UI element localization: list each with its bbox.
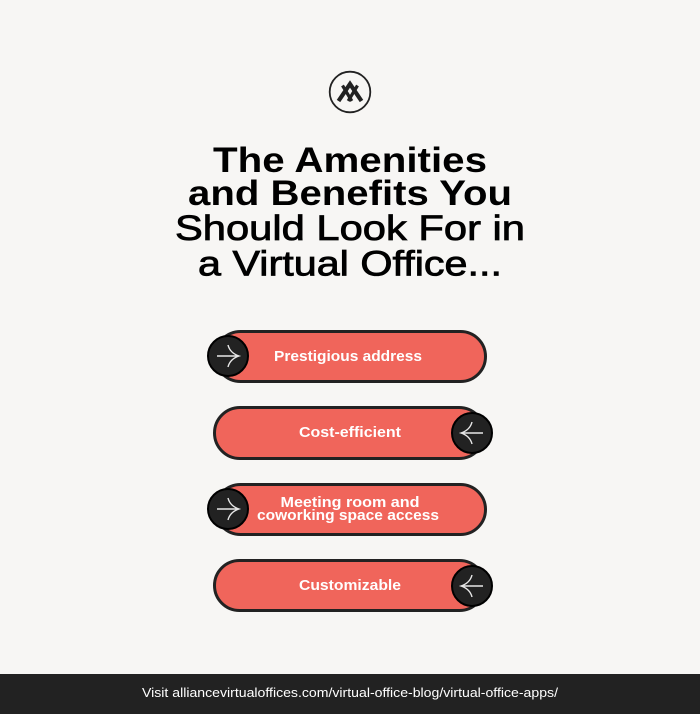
footer link text: Visit alliancevirtualoffices.com/virtual-office-blog/virtual-office-apps/ [142,685,558,700]
title: and Benefits You [188,173,512,213]
title: a Virtual Office... [198,244,502,284]
title: The Amenities [213,140,487,180]
icon: mountain logo [330,72,370,112]
footer bar [0,674,700,714]
icon: right arrow badge [208,336,248,376]
label: meeting room and coworking space access: Meeting room and [280,495,420,511]
title [175,140,525,284]
label: meeting room and coworking space access [257,495,439,524]
icon: left arrow badge [452,566,492,606]
label: prestigious address: Prestigious address [274,349,422,365]
panel: cost-efficient pill [214,408,492,458]
label: customizable: Customizable [299,578,401,594]
panel: prestigious address pill [208,332,486,382]
icon: right arrow badge [208,489,248,529]
panel: customizable pill [214,560,492,610]
icon: left arrow badge [452,413,492,453]
title: Should Look For in [175,208,525,248]
label: cost-efficient: Cost-efficient [299,425,401,441]
panel: meeting room pill [208,484,486,534]
label: meeting room and coworking space access: coworking space access [257,508,439,524]
